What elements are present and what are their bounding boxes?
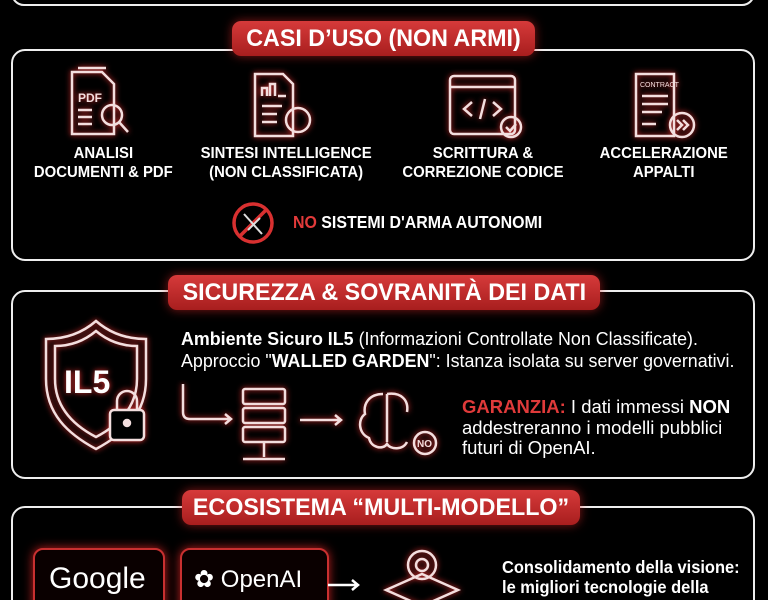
panel: sicurezza [11, 290, 755, 479]
text: garanzia [462, 396, 730, 458]
icon: pdf: PDF [78, 91, 102, 105]
icon: intelligence [255, 74, 310, 136]
label: analisi [34, 145, 172, 181]
text: garanzia: GARANZIA: I dati immessi NON [462, 396, 730, 417]
icon: server [243, 389, 285, 459]
text: ambiente sicuro: Approccio "WALLED GARDEN": Istanza isolata su server governativi. [181, 350, 734, 371]
label: sintesi [200, 145, 372, 181]
text: ambiente sicuro [181, 328, 734, 371]
icon: IL5 shield [40, 316, 152, 454]
no weapons line [232, 202, 542, 244]
label: sintesi: (NON CLASSIFICATA) [209, 164, 363, 181]
icon: brain no [360, 394, 436, 454]
arrow: elbow [183, 384, 231, 424]
icon: no weapons [232, 202, 274, 244]
arrow [300, 415, 341, 425]
label: appalti [600, 145, 728, 181]
icons row [66, 62, 700, 143]
text: consolidamento [502, 557, 740, 597]
text: consolidamento: Consolidamento della visione: [502, 557, 740, 577]
heading: casi d'uso: CASI D’USO (NON ARMI) [246, 25, 521, 52]
text: ambiente sicuro: Ambiente Sicuro IL5 (Informazioni Controllate Non Classificate). [181, 328, 698, 349]
box: openai: ✿ OpenAI [194, 566, 302, 593]
label: appalti: ACCELERAZIONE [600, 145, 728, 162]
heading: sicurezza: SICUREZZA & SOVRANITÀ DEI DATI [182, 279, 586, 306]
heading: ecosistema: ECOSISTEMA “MULTI-MODELLO” [193, 494, 569, 521]
label: appalti: APPALTI [633, 164, 695, 181]
arrow: to cube [328, 579, 360, 591]
icon: code [450, 76, 521, 137]
panel: casi d'uso [11, 49, 755, 261]
label: analisi: ANALISI [73, 145, 133, 162]
label: scrittura: CORREZIONE CODICE [402, 164, 564, 181]
label: scrittura: SCRITTURA & [433, 145, 533, 162]
label: scrittura [402, 145, 564, 181]
box: google [33, 548, 165, 600]
icon: pdf [72, 68, 128, 134]
icon: IL5 shield: IL5 [64, 364, 110, 400]
panel: ecosistema [11, 506, 755, 600]
text: garanzia: futuri di OpenAI. [462, 437, 596, 458]
box: openai [180, 548, 329, 600]
label: analisi: DOCUMENTI & PDF [34, 164, 172, 181]
top panel remnant [11, 0, 755, 6]
diagram: data flow [177, 380, 442, 465]
text: consolidamento: le migliori tecnologie della [502, 577, 709, 597]
label: sintesi: SINTESI INTELLIGENCE [200, 145, 372, 162]
icon: cube logo [380, 545, 464, 600]
icon: brain no: NO [417, 439, 432, 450]
heading: casi d'uso [232, 21, 535, 56]
icon: contract [636, 74, 694, 137]
no weapons line: NO SISTEMI D'ARMA AUTONOMI [293, 212, 542, 232]
box: google: Google [49, 562, 146, 595]
text: garanzia: addestreranno i modelli pubblici [462, 416, 722, 438]
icon: contract: CONTRACT [640, 82, 680, 89]
